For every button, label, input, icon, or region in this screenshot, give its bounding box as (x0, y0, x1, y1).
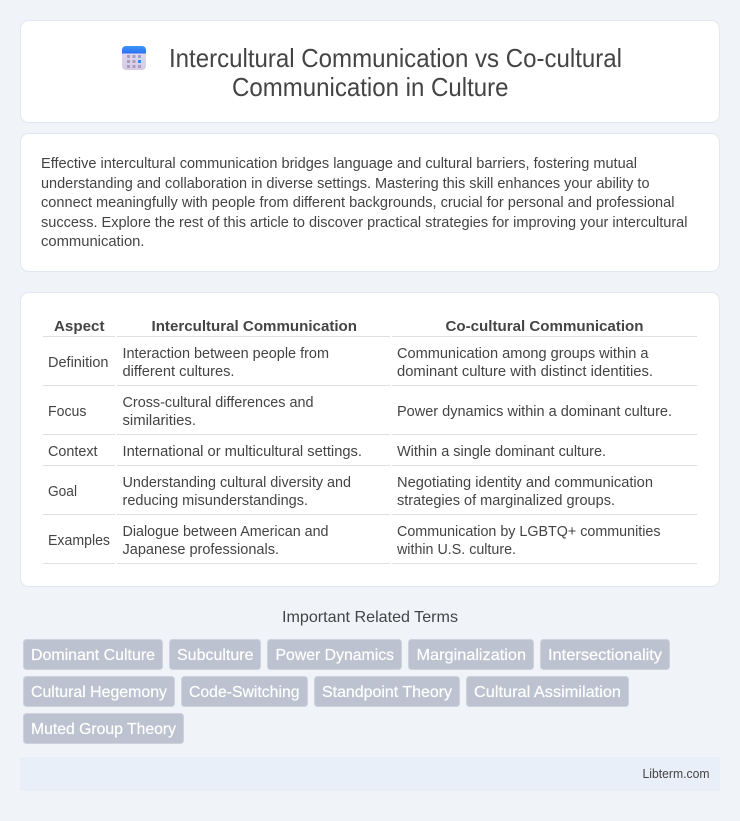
tag: Intersectionality (540, 640, 670, 670)
panel: related term tags (24, 640, 670, 744)
table row: context (43, 444, 697, 466)
text block: introduction paragraph: success. Explore the rest of this article to discover practical strategies for improving your intercultural (41, 215, 688, 231)
table row: examples: Japanese professionals. (122, 542, 279, 558)
table row: context: International or multicultural settings. (122, 444, 362, 460)
table row: goal: strategies of marginalized groups. (397, 493, 615, 509)
title (169, 45, 622, 102)
table row: definition: dominant culture with distinct identities. (397, 364, 653, 380)
tag: Power Dynamics (268, 640, 402, 670)
title: Intercultural Communication vs Co-cultural (169, 45, 622, 73)
table row: focus: Focus (48, 404, 86, 420)
table row: examples (43, 524, 697, 564)
table row: goal: Goal (48, 484, 77, 500)
table row: examples: Communication by LGBTQ+ communities (397, 524, 660, 540)
tag: Intersectionality: Intersectionality (548, 647, 662, 664)
footer (20, 757, 720, 791)
table row: goal (43, 475, 697, 515)
table row: context: Context (48, 444, 98, 460)
table row: examples: Dialogue between American and (122, 524, 328, 540)
tag: Code-Switching (182, 676, 308, 706)
tag: Standpoint Theory (314, 676, 460, 706)
tag: Dominant Culture: Dominant Culture (31, 647, 155, 664)
panel: title header (20, 20, 720, 122)
tag: Cultural Hegemony (24, 676, 174, 706)
tag: Marginalization (408, 640, 534, 670)
tag: Standpoint Theory: Standpoint Theory (322, 684, 452, 701)
table row: goal: Understanding cultural diversity and (122, 475, 351, 491)
tag: Cultural Assimilation: Cultural Assimilation (474, 684, 621, 701)
table row: focus: Power dynamics within a dominant culture. (397, 404, 672, 420)
text block: introduction paragraph: communication. (41, 234, 144, 250)
tag: Muted Group Theory: Muted Group Theory (31, 721, 176, 738)
tag: Muted Group Theory (24, 714, 184, 744)
footer: Libterm.com (642, 766, 710, 781)
text block: introduction paragraph: understanding and collaboration in diverse settings. Mastering this skill enhances your ability to (41, 176, 650, 192)
table row: definition: Interaction between people from (122, 346, 329, 362)
tag: Cultural Assimilation (466, 676, 628, 706)
heading: important related terms: Important Related Terms (282, 609, 458, 626)
tag: Code-Switching: Code-Switching (189, 684, 300, 701)
table row: goal: reducing misunderstandings. (122, 493, 308, 509)
table row: definition: different cultures. (122, 364, 234, 380)
tag: Dominant Culture (24, 640, 162, 670)
table header row: Intercultural Communication (152, 319, 357, 335)
tag: Marginalization: Marginalization (416, 647, 526, 664)
table row: examples: Examples (48, 533, 110, 549)
tag: Subculture: Subculture (177, 647, 254, 664)
table header row: Aspect (54, 319, 105, 335)
panel: comparison table (20, 292, 720, 586)
table row: context: Within a single dominant culture. (397, 444, 606, 460)
table row: goal: Negotiating identity and communication (397, 475, 653, 491)
table row: focus: similarities. (122, 413, 196, 429)
table header row (43, 319, 697, 337)
text block: introduction paragraph: connect meaningfully with people from different backgrounds, crucial for personal and professional (41, 195, 674, 211)
table row: definition (43, 346, 697, 386)
table row: focus: Cross-cultural differences and (122, 395, 314, 411)
text block: introduction paragraph (41, 156, 688, 250)
table header row: Co-cultural Communication (446, 319, 644, 335)
table row: examples: within U.S. culture. (396, 542, 516, 558)
tag: Cultural Hegemony: Cultural Hegemony (31, 684, 167, 701)
title: Communication in Culture (232, 74, 508, 102)
icon: calendar (122, 46, 146, 70)
table row: definition: Communication among groups within a (397, 346, 648, 362)
text block: introduction paragraph: Effective intercultural communication bridges language and cultural barriers, fostering mutual (41, 156, 637, 172)
table row: focus (43, 395, 697, 435)
table row: definition: Definition (48, 355, 108, 371)
panel: introduction (20, 134, 720, 272)
tag: Power Dynamics: Power Dynamics (276, 647, 394, 664)
tag: Subculture (170, 640, 260, 670)
